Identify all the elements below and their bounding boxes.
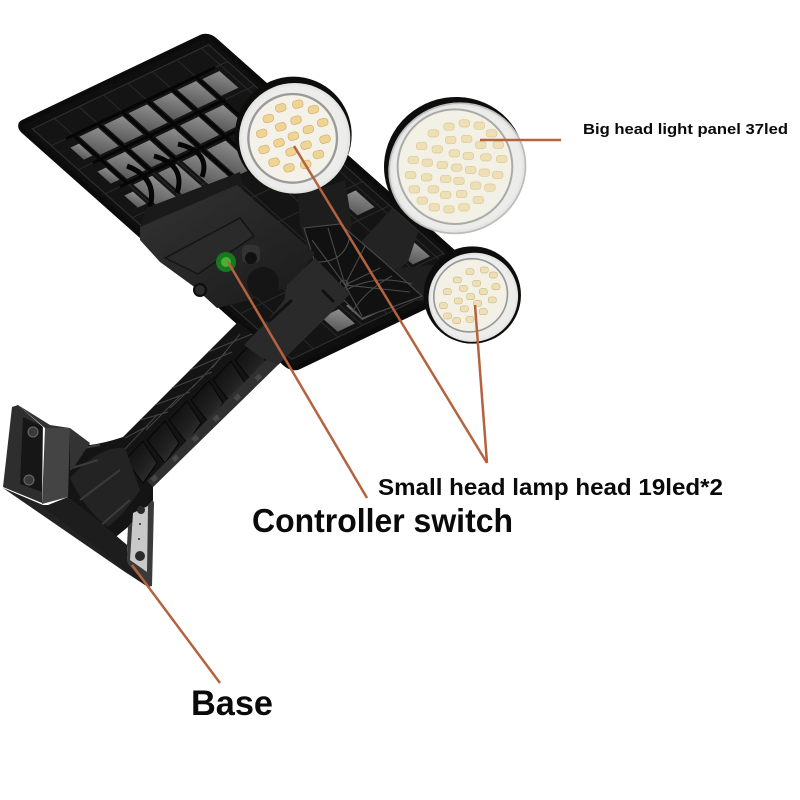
label: small heads: Small head lamp head 19led*2 xyxy=(378,474,723,500)
leader line: big head panel xyxy=(480,139,561,141)
arm crosshatch xyxy=(124,334,252,450)
arm lower ridge xyxy=(147,352,285,487)
base left face xyxy=(3,405,43,503)
base center band xyxy=(42,428,70,504)
lamp head: small right xyxy=(410,234,536,360)
upper arm xyxy=(68,322,285,540)
lamp product illustration xyxy=(3,34,544,587)
leader line: controller switch xyxy=(228,262,367,498)
icon: green switch button xyxy=(216,252,236,272)
LEDs big head xyxy=(405,120,507,213)
leader line: base xyxy=(132,565,220,683)
control box xyxy=(140,185,315,308)
lamp head: big xyxy=(365,77,544,253)
base bottom face xyxy=(3,488,148,587)
arm ridge squares xyxy=(150,374,262,482)
label: base: Base xyxy=(191,684,273,723)
arm ribs xyxy=(125,341,267,483)
lamp head: small top xyxy=(235,77,352,194)
LEDs top head xyxy=(256,99,331,173)
leader line: top small head xyxy=(294,146,487,463)
label: big head panel: Big head light panel 37led xyxy=(583,121,788,138)
lattice hub xyxy=(304,224,422,318)
LEDs right head xyxy=(439,267,500,324)
base recess xyxy=(20,417,42,492)
neck to small head right xyxy=(375,264,444,302)
small bolt xyxy=(194,284,206,296)
wall mount base xyxy=(3,405,154,587)
plate holes xyxy=(135,506,145,561)
arm end barrel xyxy=(70,448,140,527)
base top wedge xyxy=(18,405,90,470)
side plate xyxy=(127,500,154,587)
curved panel ribs xyxy=(127,144,204,207)
base lower face xyxy=(43,497,148,587)
arm clamp band xyxy=(244,258,350,365)
silver plate xyxy=(130,506,148,572)
solar panel xyxy=(17,34,483,370)
label: controller switch: Controller switch xyxy=(252,502,513,539)
box connector xyxy=(247,267,279,299)
barrel ribs xyxy=(72,445,130,526)
leader line: right small head xyxy=(475,305,487,463)
arm clamp shadow xyxy=(268,290,334,322)
box lid xyxy=(165,218,254,274)
bolt xyxy=(242,245,260,264)
screw holes xyxy=(24,427,38,485)
neck to big head xyxy=(352,208,418,284)
box top ledge xyxy=(140,172,244,228)
neck to small head top xyxy=(298,180,352,272)
